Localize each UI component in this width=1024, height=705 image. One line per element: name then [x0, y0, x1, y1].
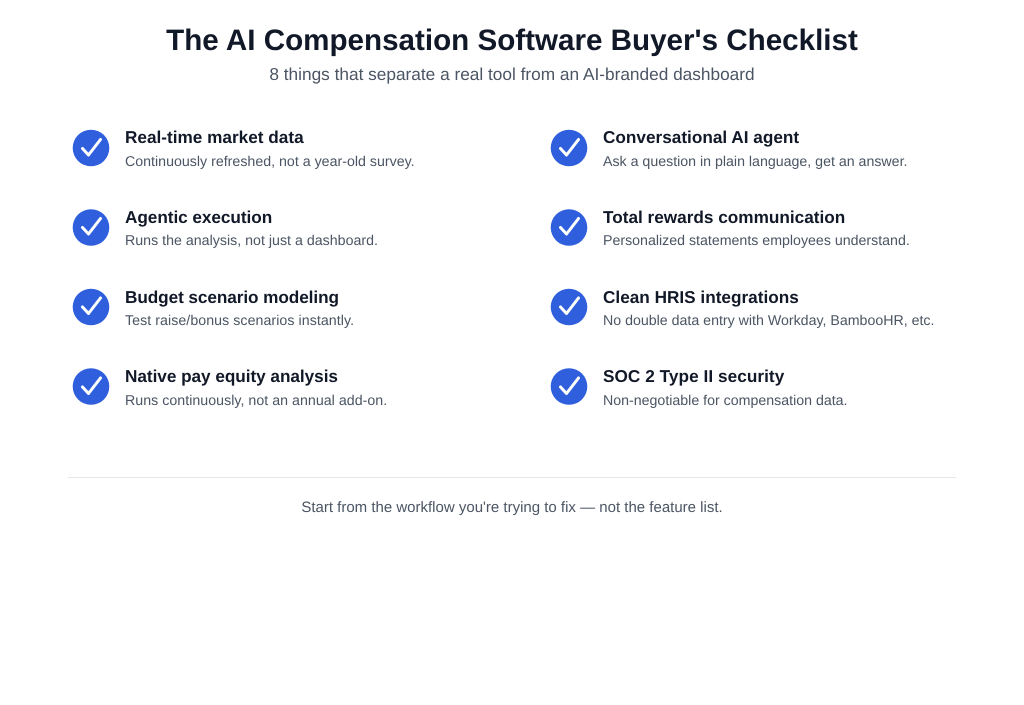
checklist item: real-time market data: Continuously refreshed, not a year-old survey. — [125, 154, 415, 170]
checklist item: native pay equity analysis: Runs continuously, not an annual add-on. — [125, 393, 387, 409]
checklist item: agentic execution: Agentic execution — [125, 207, 272, 227]
checklist item: SOC 2 Type II security: Non-negotiable for compensation data. — [603, 393, 848, 409]
checklist item: native pay equity analysis: Native pay equity analysis — [125, 366, 338, 386]
checklist item: budget scenario modeling: Budget scenario modeling — [125, 287, 339, 307]
checklist item: total rewards communication: Total rewards communication — [603, 207, 845, 227]
checklist item: clean HRIS integrations: Clean HRIS integrations — [603, 287, 799, 307]
title: The AI Compensation Software Buyer's Checklist — [166, 24, 858, 57]
checklist item: native pay equity analysis — [72, 366, 387, 409]
subtitle: 8 things that separate a real tool from an AI-branded dashboard — [269, 64, 755, 84]
checklist item: clean HRIS integrations — [550, 287, 934, 329]
checklist item: total rewards communication — [550, 207, 910, 249]
checklist item: agentic execution: Runs the analysis, not just a dashboard. — [125, 233, 378, 249]
footer note: Start from the workflow you're trying to fix — not the feature list. — [301, 499, 723, 516]
checklist item: total rewards communication: Personalized statements employees understand. — [603, 233, 910, 249]
checklist item: clean HRIS integrations: No double data entry with Workday, BambooHR, etc. — [603, 313, 934, 329]
checklist item: real-time market data — [72, 127, 415, 170]
checklist item: agentic execution — [72, 207, 378, 249]
checklist item: real-time market data: Real-time market data — [125, 127, 304, 147]
checklist item: conversational AI agent: Conversational AI agent — [603, 127, 799, 147]
checklist item: SOC 2 Type II security: SOC 2 Type II security — [603, 366, 784, 386]
checklist item: conversational AI agent: Ask a question in plain language, get an answer. — [603, 154, 907, 170]
checklist item: SOC 2 Type II security — [550, 366, 848, 409]
checklist item: budget scenario modeling: Test raise/bonus scenarios instantly. — [125, 313, 354, 329]
checklist item: budget scenario modeling — [72, 287, 354, 329]
checklist item: conversational AI agent — [550, 127, 907, 170]
